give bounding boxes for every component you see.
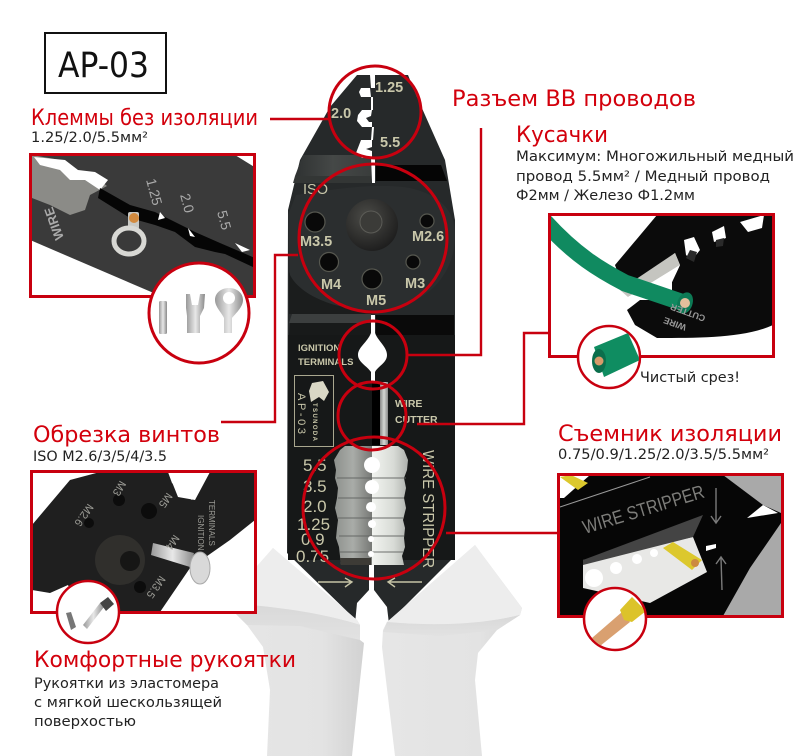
heading: handles: Комфортные рукоятки	[34, 648, 296, 673]
text: cutter capacity: Ф2мм / Железо Ф1.2мм	[516, 188, 695, 204]
panel: bolt cutting photo: M5	[156, 490, 174, 510]
panel: terminal crimp photo: WIRE	[41, 205, 67, 242]
text: stripper sizes: 0.75/0.9/1.25/2.0/3.5/5.5мм²	[558, 447, 769, 463]
text: handles: поверхостью	[34, 714, 136, 730]
panel: bolt cutting photo: M3.5	[144, 573, 167, 600]
tool engraving labels: M5	[366, 293, 386, 309]
inset: stripped wire	[584, 588, 646, 650]
tool engraving labels: CUTTER	[395, 414, 438, 426]
inset: cut bolts	[57, 581, 119, 643]
tool engraving labels: IGNITION	[298, 343, 340, 354]
reflective bands	[288, 155, 455, 560]
tool engraving labels: WIRE	[395, 398, 422, 410]
direction arrows	[318, 578, 422, 587]
heading: terminals: Клеммы без изоляции	[31, 106, 258, 131]
panel: terminal crimp photo	[30, 154, 256, 300]
jaw notches and slit	[355, 75, 389, 624]
tool engraving labels: 0.9	[301, 530, 325, 549]
heading: stripper: Съемник изоляции	[558, 422, 782, 447]
panel: terminal crimp photo: 2.0	[177, 192, 198, 215]
panel: bolt cutting photo: TERMINALS	[207, 500, 216, 546]
pivot plate and bolt	[288, 186, 455, 310]
heading: cutter: Кусачки	[516, 123, 608, 148]
panel: wire stripper photo: WIRE STRIPPER	[580, 482, 707, 539]
text: handles: с мягкой шескользящей	[34, 695, 222, 711]
panel: wire cutter photo	[545, 214, 774, 356]
text: terminal sizes: 1.25/2.0/5.5мм²	[31, 130, 148, 146]
right handle	[382, 545, 522, 756]
left handle	[225, 548, 364, 756]
panel: wire stripper photo	[558, 474, 782, 616]
tool engraving labels: 5.5	[380, 135, 400, 151]
panel: terminal crimp photo: 1.25	[143, 177, 166, 207]
brand logo plate: TSUNODA	[311, 403, 317, 442]
text: cutter capacity: провод 5.5мм² / Медный провод	[516, 169, 770, 185]
text: bolt sizes: ISO M2.6/3/5/4/3.5	[33, 449, 167, 465]
tool engraving labels: M3	[405, 276, 425, 292]
tool engraving labels: 2.0	[331, 106, 351, 122]
brand logo plate: AP-03	[295, 393, 307, 434]
text: cutter capacity	[516, 149, 794, 204]
heading: wire connector: Разъем ВВ проводов	[452, 87, 696, 112]
panel: bolt cutting photo: M2.6	[72, 501, 95, 528]
screw holes	[305, 212, 434, 289]
tool engraving labels: TERMINALS	[298, 357, 353, 368]
inset: terminal types	[149, 263, 249, 363]
wire cutter groove	[372, 382, 388, 445]
tool engraving labels: 1.25	[297, 515, 330, 534]
panel: bolt cutting photo: M3	[110, 478, 128, 498]
panel: bolt cutting photo: IGNITION	[196, 515, 205, 551]
model label: AP-03	[58, 46, 149, 86]
text: handles	[34, 676, 222, 730]
tool engraving labels: 3.5	[303, 477, 327, 496]
panel: bolt cutting photo	[32, 472, 256, 612]
panel: bolt cutting photo: M4	[163, 532, 181, 552]
wire stripper teeth	[334, 446, 408, 565]
tool engraving labels: WIRE STRIPPER	[419, 450, 436, 568]
crimping plier illustration	[225, 75, 522, 756]
panel: wire cutter photo: CUTTER	[668, 301, 707, 324]
plier metal body	[287, 75, 455, 623]
text: handles: Рукоятки из эластомера	[34, 676, 219, 692]
inset: clean cut wire	[578, 326, 640, 388]
tool engraving labels: ISO	[303, 182, 328, 198]
panel: wire cutter photo: WIRE	[662, 315, 688, 333]
text: cutter capacity: Максимум: Многожильный медный	[516, 149, 794, 165]
callout circles	[299, 66, 447, 579]
tool engraving labels: 1.25	[375, 80, 403, 96]
panel: terminal crimp photo: 5.5	[214, 209, 235, 232]
stripper holes	[364, 457, 380, 557]
tool engraving labels: M3.5	[300, 234, 332, 250]
tool engraving labels: 0.75	[296, 547, 329, 566]
tool engraving labels	[296, 80, 444, 568]
tool engraving labels: M4	[321, 277, 341, 293]
brand logo plate	[294, 376, 334, 446]
model label	[45, 33, 166, 93]
leader lines	[221, 119, 558, 533]
tool engraving labels: 5.5	[303, 456, 327, 475]
heading: bolt cutter: Обрезка винтов	[33, 423, 220, 448]
tool engraving labels: 2.0	[303, 497, 327, 516]
tool engraving labels: M2.6	[412, 229, 444, 245]
caption: clean cut: Чистый срез!	[640, 370, 740, 386]
